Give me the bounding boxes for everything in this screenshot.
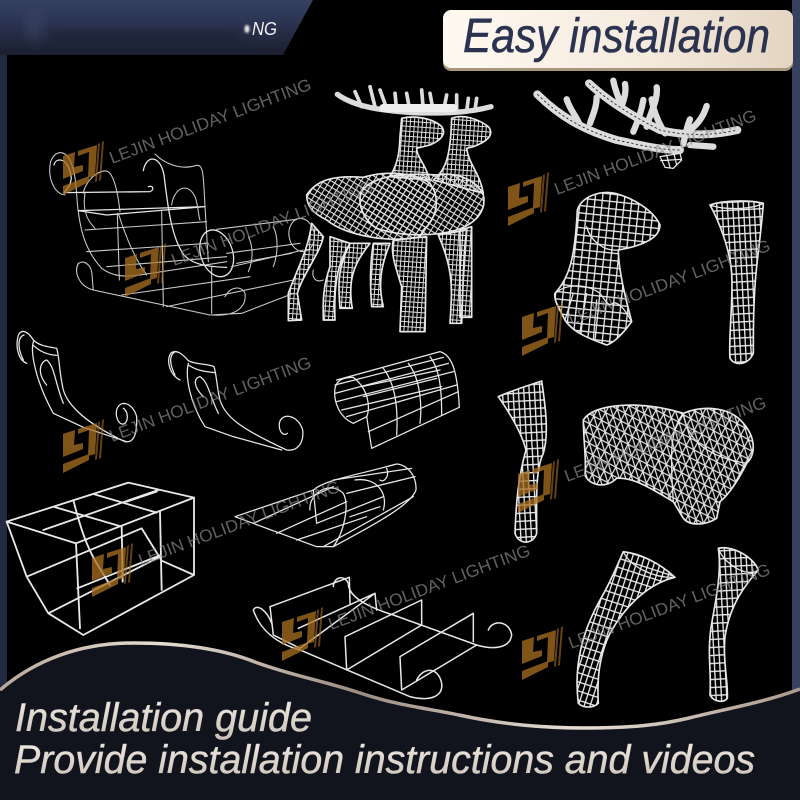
watermark: text 6: LEJIN HOLIDAY LIGHTING	[552, 106, 759, 199]
watermark: text 4: LEJIN HOLIDAY LIGHTING	[136, 477, 343, 570]
wireframe: curved leg	[577, 552, 675, 707]
wireframe: upper leg left	[498, 381, 546, 542]
caption: Installation guide: Installation guide	[15, 696, 312, 740]
watermark: text 2: LEJIN HOLIDAY LIGHTING	[169, 177, 376, 270]
background frame: right strip	[792, 0, 800, 800]
watermark: logo 3	[63, 419, 104, 473]
wireframe: two reindeer	[288, 87, 491, 332]
wireframe: half cylinder lower	[235, 464, 416, 547]
watermark: logo 8	[518, 459, 559, 513]
rear reindeer	[288, 117, 444, 332]
header banner: NG	[252, 19, 277, 39]
watermark: text 8: LEJIN HOLIDAY LIGHTING	[562, 393, 769, 486]
watermark: text 1: LEJIN HOLIDAY LIGHTING	[107, 75, 314, 168]
background frame: left strip	[0, 0, 7, 800]
wireframe: tapered leg	[709, 548, 758, 701]
wireframe: half cylinder upper	[335, 352, 459, 448]
watermark: text 3: LEJIN HOLIDAY LIGHTING	[107, 353, 314, 446]
title badge: Easy installation: Easy installation	[463, 10, 770, 63]
wireframe: sleigh base	[253, 577, 512, 699]
bottom panel curved rim	[0, 643, 800, 728]
watermark: text 5: LEJIN HOLIDAY LIGHTING	[326, 541, 533, 634]
wireframe: sleigh	[50, 153, 323, 315]
wireframe: upper leg right	[710, 201, 763, 364]
watermark: logo 7	[522, 302, 563, 356]
wireframe: reindeer body	[583, 405, 753, 524]
front reindeer	[360, 117, 491, 323]
wireframe: sleigh runner right	[169, 352, 303, 450]
wireframe: reindeer head	[555, 192, 660, 345]
watermark: text 7: LEJIN HOLIDAY LIGHTING	[566, 236, 773, 329]
wireframe: sleigh box frame	[7, 483, 194, 635]
bottom panel fill	[0, 643, 800, 800]
wireframe: sleigh runner left	[17, 331, 137, 442]
wireframe: antler	[537, 81, 737, 168]
watermark: logo 5	[282, 607, 323, 661]
watermark: logo 6	[508, 172, 549, 226]
watermark: logo 1	[63, 141, 104, 195]
header banner	[0, 0, 313, 55]
watermark: logo 4	[92, 543, 133, 597]
caption: Provide installation instructions and videos: Provide installation instructions and videos	[14, 738, 755, 782]
watermark: logo 2	[125, 243, 166, 297]
watermark: logo 9	[522, 626, 563, 680]
watermark: text 9: LEJIN HOLIDAY LIGHTING	[566, 560, 773, 653]
antlers	[337, 87, 491, 113]
